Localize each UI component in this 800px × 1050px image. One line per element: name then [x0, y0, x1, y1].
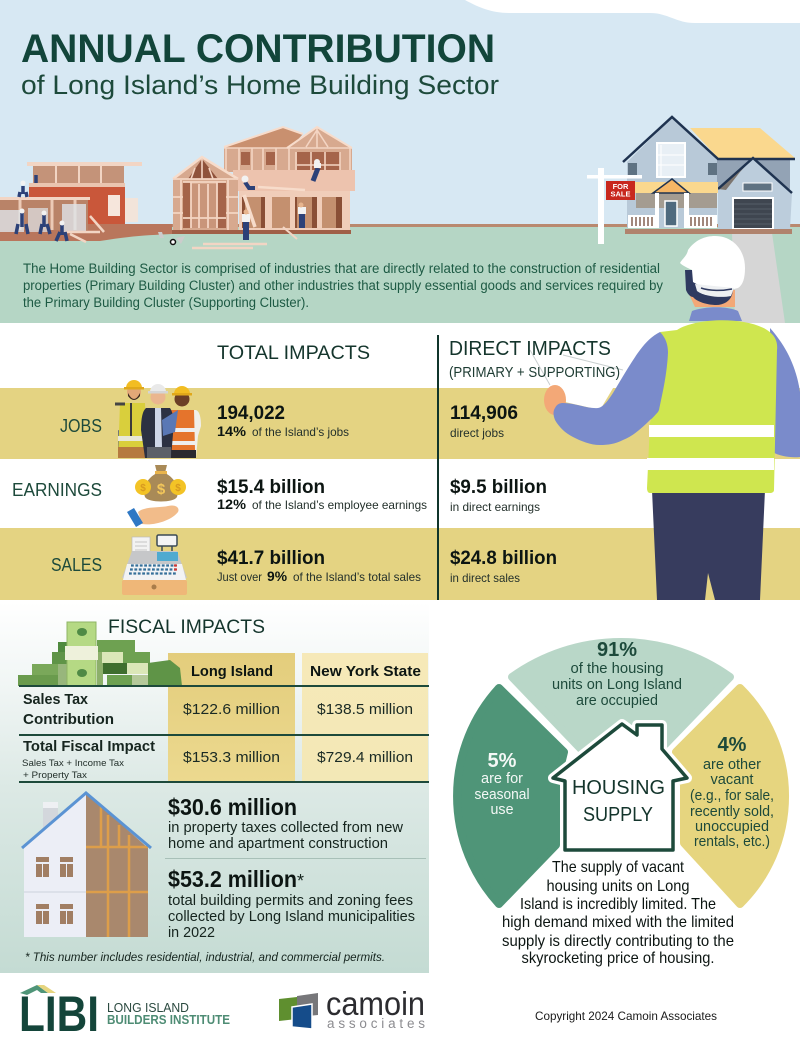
- table: sales tax row: Sales Tax: [23, 691, 89, 708]
- label: 91 percent occupied: units on Long Island: [552, 676, 682, 693]
- stat: property taxes: [168, 794, 403, 852]
- row label: earnings: EARNINGS: [12, 480, 102, 500]
- house outline: [553, 724, 687, 850]
- icon: stack of cash: [18, 622, 182, 686]
- label: 91 percent occupied: of the housing: [570, 660, 664, 677]
- middle worker: [141, 408, 174, 458]
- table columns: [168, 653, 295, 782]
- row label: jobs: JOBS: [60, 416, 102, 436]
- figures: jobs total: of the Island’s jobs: [252, 425, 349, 439]
- label: 91 percent occupied: [552, 639, 682, 709]
- figures: sales direct: $24.8 billion: [450, 548, 557, 569]
- label: 4 percent other vacant: (e.g., for sale,: [690, 787, 774, 804]
- row label: sales: SALES: [51, 555, 102, 575]
- figures: jobs direct: [450, 403, 518, 440]
- logo: Long Island Builders Institute: LONG ISLAND: [107, 1001, 189, 1015]
- left arm: [554, 332, 668, 445]
- segment: other vacant: [676, 688, 785, 904]
- panel: jobs band: [0, 388, 800, 459]
- heading: direct impacts: (PRIMARY + SUPPORTING): [449, 364, 620, 381]
- icon: money bag and hand: [127, 465, 186, 527]
- right worker: [170, 410, 201, 458]
- heading: total impacts: TOTAL IMPACTS: [217, 342, 370, 364]
- figures: earnings total: $15.4 billion: [217, 477, 325, 498]
- house label: SUPPLY: [583, 804, 653, 826]
- figures: earnings direct: $9.5 billion: [450, 477, 547, 498]
- illustration: house for sale: [587, 117, 795, 244]
- stat: property taxes: home and apartment construction: [168, 835, 388, 852]
- heading: direct impacts: DIRECT IMPACTS: [449, 338, 611, 360]
- table: total fiscal impact row: $729.4 million: [317, 749, 413, 766]
- intro text block: The Home Building Sector is comprised of industries that are directly related to the construction of residential: [23, 261, 660, 276]
- house label: [572, 777, 665, 826]
- paper: [530, 350, 625, 410]
- text block: housing note: supply is directly contributing to the: [502, 933, 734, 950]
- label: 5 percent seasonal: use: [490, 801, 514, 818]
- label: 4 percent other vacant: 4%: [718, 734, 747, 756]
- illustration: worker with hard hat: [530, 236, 800, 600]
- copyright: Copyright 2024 Camoin Associates: [535, 1009, 717, 1023]
- panel: hero scene: [0, 0, 800, 323]
- label: 91 percent occupied: 91%: [597, 639, 637, 661]
- table: total fiscal impact row: $153.3 million: [183, 749, 280, 766]
- icon: workers: [115, 380, 201, 458]
- stat: permits and fees: [168, 866, 415, 941]
- stat: permits and fees: collected by Long Island municipalities: [168, 908, 415, 925]
- table: sales tax row: [23, 691, 413, 728]
- intro text block: properties (Primary Building Cluster) and other industries that supply essential goods and services required by: [23, 278, 663, 293]
- label: 5 percent seasonal: 5%: [488, 750, 517, 772]
- label: 4 percent other vacant: vacant: [710, 771, 754, 788]
- divider between total and direct impacts: [437, 335, 439, 600]
- label: 5 percent seasonal: [474, 750, 530, 818]
- left worker: [118, 408, 148, 458]
- figures: earnings direct: [450, 477, 547, 514]
- heading: fiscal impacts: FISCAL IMPACTS: [108, 616, 265, 638]
- for sale sign: FOR: [613, 182, 629, 191]
- icon: house cutaway: [22, 793, 151, 937]
- right gable: [287, 127, 352, 180]
- neck and collar: [687, 290, 735, 307]
- figures: earnings total: [217, 477, 427, 512]
- table: total fiscal impact row: [22, 738, 413, 781]
- title: [21, 27, 499, 100]
- figures: jobs direct: direct jobs: [450, 426, 504, 440]
- text block: housing note: skyrocketing price of housing.: [522, 950, 714, 967]
- trousers: [652, 490, 765, 600]
- figures: jobs total: 14%: [217, 423, 247, 439]
- table: sales tax row: $138.5 million: [317, 701, 413, 718]
- icon: money bag and hand: $: [175, 483, 181, 494]
- figures: jobs direct: 114,906: [450, 403, 518, 424]
- footnote: * This number includes residential, industrial, and commercial permits.: [25, 950, 385, 964]
- logo: Long Island Builders Institute: BUILDERS INSTITUTE: [107, 1013, 230, 1027]
- figures: earnings direct: in direct earnings: [450, 500, 540, 514]
- figures: sales total: of the Island’s total sales: [293, 570, 421, 584]
- figures: jobs total: 194,022: [217, 403, 285, 424]
- logo: Long Island Builders Institute: [19, 985, 230, 1042]
- text block: housing note: Island is incredibly limited. The: [520, 896, 716, 913]
- illustration: brick house under construction: [0, 162, 172, 242]
- for sale sign: SALE: [610, 190, 631, 198]
- table rules: [19, 686, 429, 782]
- panel: housing supply: [457, 639, 785, 967]
- table: sales tax row: $122.6 million: [183, 701, 280, 718]
- logo: Camoin Associates: [279, 985, 425, 1031]
- label: 5 percent seasonal: are for: [481, 770, 523, 787]
- segment: occupied: [512, 642, 730, 790]
- right arm: [770, 328, 800, 457]
- platform: [233, 170, 355, 191]
- figures: sales total: [217, 548, 421, 584]
- title: ANNUAL CONTRIBUTION: [21, 27, 495, 71]
- lower storey: [239, 191, 350, 230]
- stat: property taxes: in property taxes collected from new: [168, 819, 403, 836]
- figures: earnings total: 12%: [217, 496, 247, 512]
- stat: permits and fees: *: [297, 871, 304, 891]
- illustration: timber frame house: [158, 127, 355, 248]
- high-visibility vest: [647, 320, 777, 493]
- table: column headers: New York State: [310, 663, 421, 680]
- stat: permits and fees: $53.2 million: [168, 866, 297, 892]
- label: 4 percent other vacant: unoccupied: [695, 818, 769, 835]
- lumber and wheelbarrow: [192, 244, 267, 248]
- figures: sales total: 9%: [267, 568, 288, 584]
- table: total fiscal impact row: Sales Tax + Income Tax: [22, 758, 124, 769]
- text block: housing note: housing units on Long: [546, 878, 690, 895]
- figures: jobs total: [217, 403, 349, 439]
- label: 4 percent other vacant: [690, 734, 774, 850]
- upper storey: [224, 127, 303, 148]
- left gable: [173, 157, 238, 230]
- label: 4 percent other vacant: recently sold,: [690, 803, 774, 820]
- icon: money bag and hand: $: [157, 481, 166, 498]
- hair: [685, 270, 735, 305]
- panel: sales band: [0, 528, 800, 600]
- figures: sales total: $41.7 billion: [217, 548, 325, 569]
- icon: money bag and hand: $: [140, 483, 146, 494]
- house label: HOUSING: [572, 777, 665, 799]
- stat: permits and fees: in 2022: [168, 924, 215, 941]
- icon: cash register: [122, 535, 187, 595]
- intro text block: the Primary Building Cluster (Supporting Cluster).: [23, 295, 309, 310]
- text block: housing note: [502, 859, 734, 967]
- planks and workers: [244, 195, 255, 227]
- hand: [544, 385, 566, 415]
- table: column headers: [191, 663, 421, 680]
- segment: seasonal use: [457, 688, 564, 904]
- stat: permits and fees: total building permits and zoning fees: [168, 892, 413, 909]
- table: column headers: Long Island: [191, 663, 273, 680]
- label: 4 percent other vacant: are other: [703, 756, 761, 773]
- table: total fiscal impact row: Total Fiscal Impact: [23, 738, 155, 755]
- text block: housing note: high demand mixed with the limited: [502, 914, 734, 931]
- figures: earnings total: of the Island’s employee earnings: [252, 498, 427, 512]
- text block: housing note: The supply of vacant: [552, 859, 684, 876]
- label: 91 percent occupied: are occupied: [576, 692, 658, 709]
- logo: Camoin Associates: associates: [327, 1016, 425, 1031]
- house border: [553, 724, 687, 850]
- label: 5 percent seasonal: seasonal: [474, 786, 530, 803]
- for sale sign: [587, 168, 642, 244]
- figures: sales direct: in direct sales: [450, 571, 520, 585]
- subtitle: of Long Island’s Home Building Sector: [21, 70, 499, 100]
- panel: fiscal impacts: [0, 602, 429, 973]
- table: sales tax row: Contribution: [23, 711, 114, 728]
- hard hat: [680, 236, 745, 297]
- table: total fiscal impact row: + Property Tax: [23, 770, 87, 781]
- label: 4 percent other vacant: rentals, etc.): [694, 833, 770, 850]
- logo: Long Island Builders Institute: LIBI: [19, 986, 99, 1042]
- base: [172, 230, 351, 234]
- stat: property taxes: $30.6 million: [168, 794, 297, 820]
- figures: sales total: Just over: [217, 570, 262, 584]
- figures: sales direct: [450, 548, 557, 585]
- heading: direct impacts: [449, 338, 620, 381]
- intro text block: [23, 261, 663, 310]
- logo: Camoin Associates: camoin: [326, 985, 425, 1022]
